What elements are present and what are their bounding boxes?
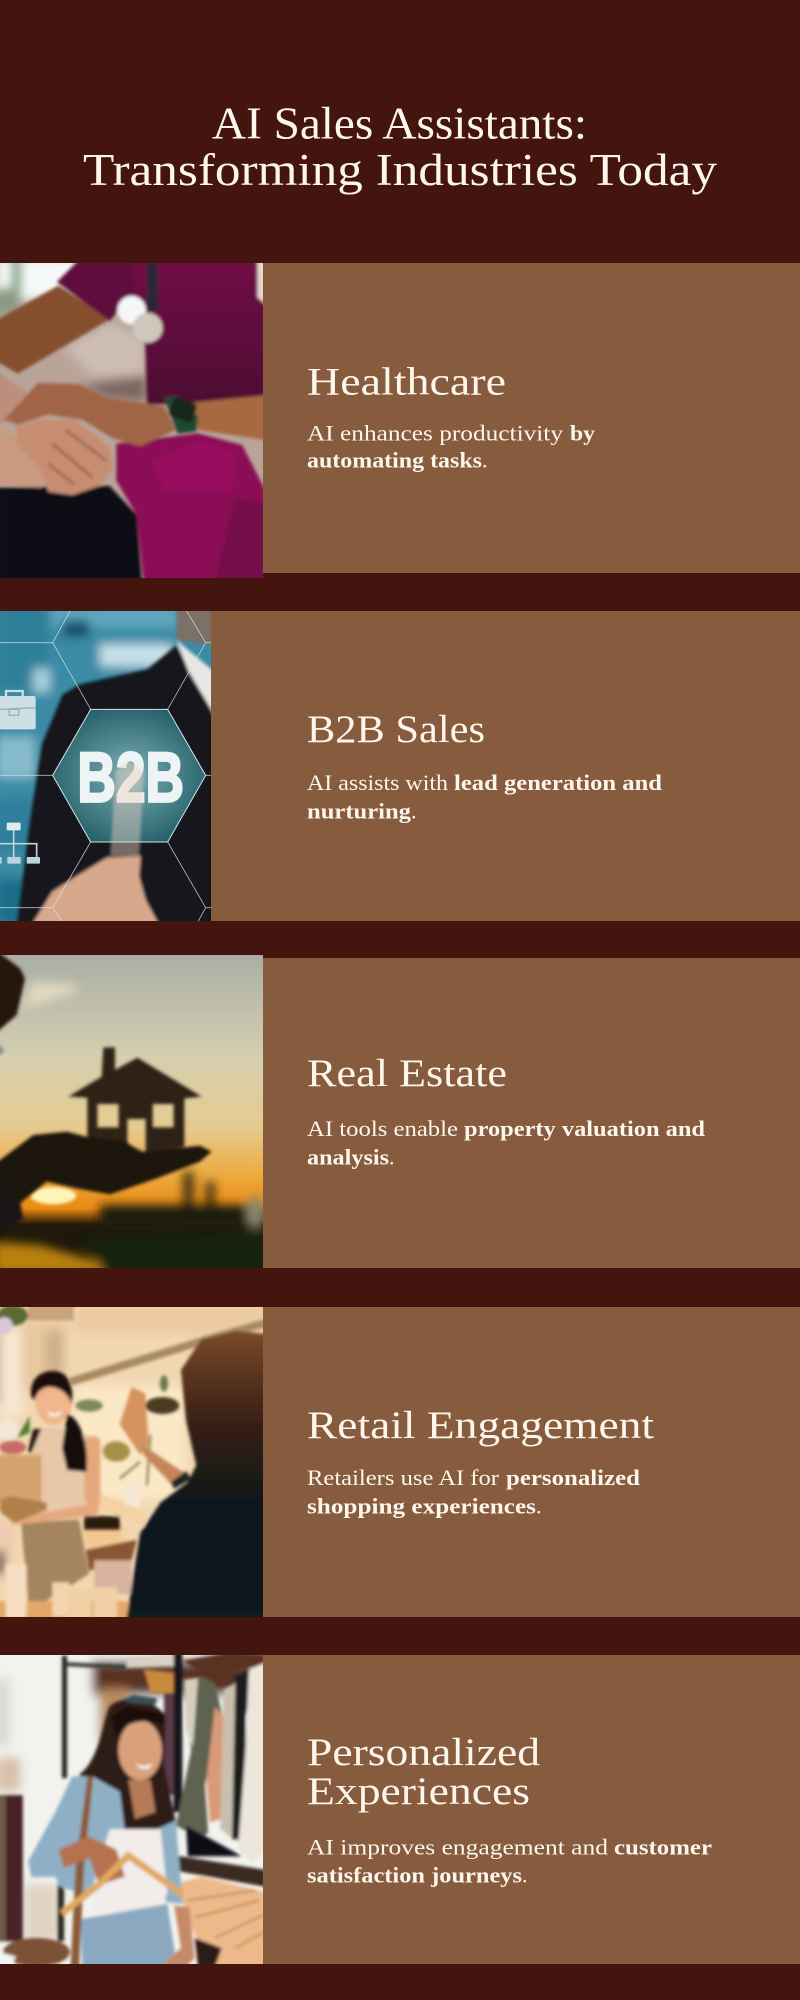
- photo: florist greeting a customer: [0, 1307, 263, 1617]
- description: AI tools enable: [307, 1116, 458, 1141]
- panel: personalized experiences: [0, 1647, 800, 1972]
- description: [307, 770, 662, 824]
- description: AI enhances productivity: [307, 420, 563, 446]
- photo: hand holding house silhouette at sunset: [0, 955, 263, 1268]
- icon: org chart: [0, 823, 40, 864]
- description: .: [482, 448, 488, 472]
- heading: Retail Engagement: [307, 1404, 654, 1447]
- icon: briefcase: [0, 691, 36, 729]
- title: [83, 98, 718, 195]
- description: customer: [614, 1834, 712, 1860]
- image lettering: B2B: B2B: [77, 737, 184, 816]
- panel: retail engagement: [0, 1300, 800, 1628]
- heading: B2B Sales: [307, 708, 485, 751]
- description: lead generation and: [454, 770, 662, 795]
- description: .: [389, 1144, 394, 1170]
- heading: Healthcare: [307, 360, 506, 404]
- heading: Personalized: [307, 1731, 541, 1774]
- description: [307, 1465, 640, 1518]
- description: nurturing: [307, 798, 411, 824]
- description: personalized: [506, 1465, 640, 1490]
- description: .: [522, 1862, 528, 1888]
- description: [307, 1116, 705, 1170]
- hexagon lines: [0, 611, 211, 921]
- description: AI improves engagement and: [307, 1834, 608, 1860]
- title: Transforming Industries Today: [83, 145, 718, 195]
- photo: smiling shopper with a hanger: [0, 1655, 263, 1964]
- description: shopping experiences: [307, 1494, 536, 1518]
- description: property valuation and: [464, 1116, 705, 1141]
- photo: nurse holding patient's hands: [0, 263, 263, 578]
- panel: healthcare: [0, 258, 800, 583]
- description: AI assists with: [307, 770, 448, 795]
- heading: Experiences: [307, 1770, 530, 1813]
- description: .: [411, 798, 416, 824]
- description: automating tasks: [307, 448, 482, 472]
- title: AI Sales Assistants:: [212, 98, 587, 148]
- heading: Real Estate: [307, 1052, 507, 1095]
- panel: real estate: [0, 948, 800, 1275]
- description: satisfaction journeys: [307, 1862, 522, 1888]
- description: Retailers use AI for: [307, 1465, 500, 1490]
- description: [307, 1834, 712, 1888]
- photo: B2B hexagon touch screen: [0, 611, 211, 921]
- description: [307, 420, 595, 472]
- heading: [307, 1731, 541, 1813]
- description: analysis: [307, 1144, 389, 1170]
- description: .: [536, 1494, 542, 1518]
- panel: B2B sales: [0, 606, 800, 928]
- description: by: [570, 420, 595, 446]
